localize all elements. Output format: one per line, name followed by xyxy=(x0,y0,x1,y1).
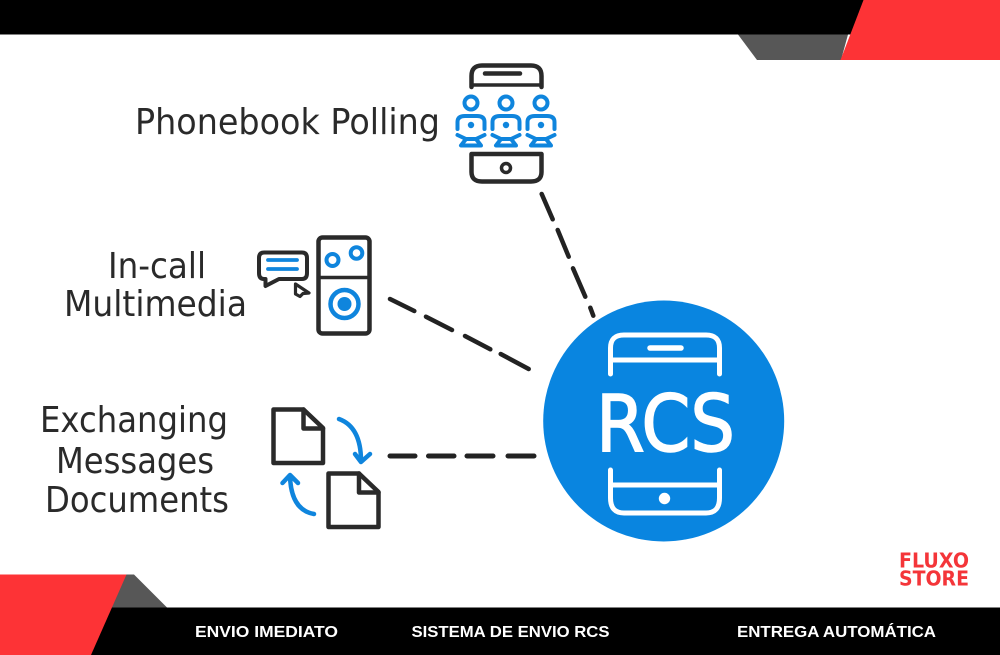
person 2 xyxy=(492,96,520,146)
top banner xyxy=(0,0,1000,60)
logo: Fluxo Store: STORE xyxy=(899,566,969,590)
icon: phone with three people xyxy=(458,66,554,182)
label: Exchanging Messages Documents: Messages xyxy=(56,441,214,482)
footer: sistema de envio rcs: SISTEMA DE ENVIO RCS xyxy=(412,624,610,641)
label: In-call Multimedia: In-call xyxy=(108,246,206,287)
dashed connector: documents to RCS xyxy=(390,454,534,458)
footer: entrega automatica: ENTREGA AUTOMÁTICA xyxy=(737,624,936,641)
logo: Fluxo Store xyxy=(899,548,969,590)
badge text: RCS xyxy=(596,380,735,470)
dashed connector: in-call to RCS xyxy=(390,299,529,369)
bottom banner xyxy=(0,574,1000,655)
label: Exchanging Messages Documents xyxy=(40,400,229,521)
footer: envio imediato: ENVIO IMEDIATO xyxy=(195,624,338,641)
label: In-call Multimedia xyxy=(64,246,247,325)
label: Phonebook Polling: Phonebook Polling xyxy=(135,102,440,143)
person 3 xyxy=(528,96,554,146)
icon: exchanging documents xyxy=(274,410,378,527)
dashed connector: phonebook to RCS xyxy=(542,194,593,316)
label: In-call Multimedia: Multimedia xyxy=(64,284,247,325)
person 1 xyxy=(458,96,484,146)
badge phone top xyxy=(610,335,720,374)
label: Exchanging Messages Documents: Documents xyxy=(45,480,229,521)
label: Exchanging Messages Documents: Exchanging xyxy=(40,400,228,441)
logo: Fluxo Store: FLUXO xyxy=(899,548,969,572)
badge phone bottom xyxy=(610,470,720,513)
icon: phone with chat bubble xyxy=(259,238,370,334)
RCS badge xyxy=(543,300,784,542)
